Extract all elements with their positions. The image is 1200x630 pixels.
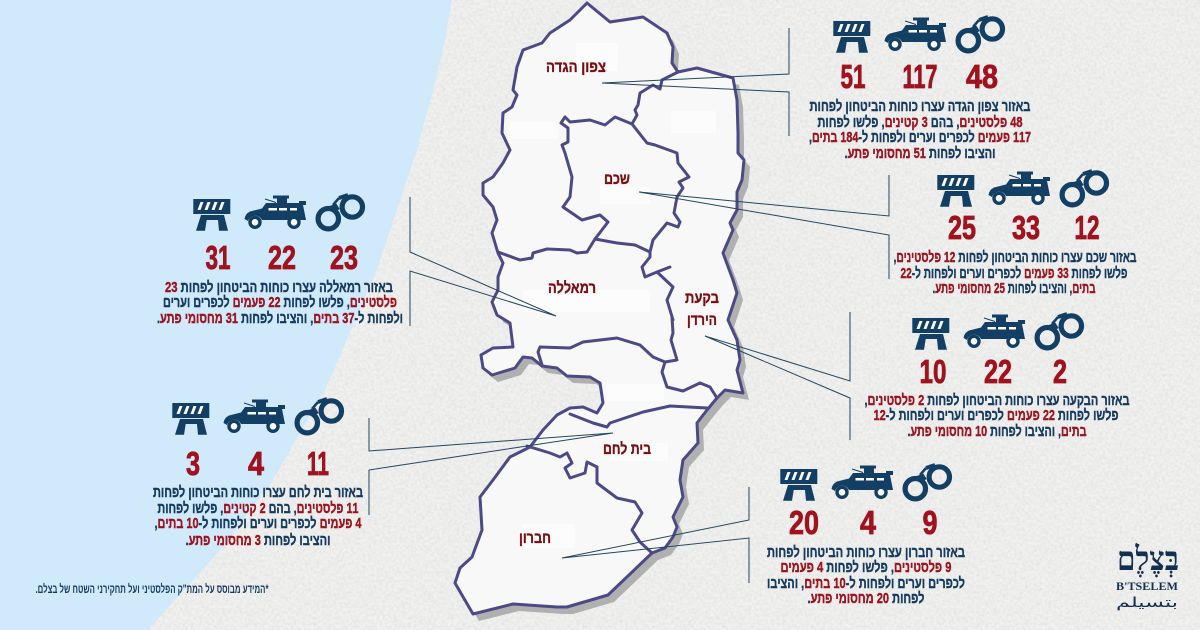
region label: hebron: חברון: [519, 530, 551, 547]
text block: באזור צפון הגדה עצרו כוחות הביטחון לפחות: [810, 98, 1031, 115]
numbers: 11: [307, 445, 329, 482]
panel: nablus: [894, 171, 1137, 297]
region label: nablus: שכם: [604, 171, 630, 188]
logo: B'Tselem: [1116, 542, 1179, 611]
region label: north: צפון הגדה: [546, 59, 606, 76]
numbers: 33: [1012, 209, 1040, 246]
text block: בתים, והציבו לפחות 25 מחסומי פתע.: [932, 280, 1096, 297]
text block: ולפחות ל-37 בתים, והציבו לפחות 31 מחסומי פתע.: [157, 310, 403, 327]
panel: ramallah: [157, 195, 403, 327]
text block: באזור הבקעה עצרו כוחות הביטחון לפחות 2 פלסטינים,: [864, 392, 1130, 409]
icons: barrier, vehicle, handcuffs: [937, 171, 1106, 207]
text block: 117 פעמים לכפרים וערים ולפחות ל-184 בתים,: [809, 129, 1031, 146]
region label: jordan valley: בקעת: [685, 290, 719, 307]
panel: jordan valley: [864, 314, 1130, 440]
numbers: 9: [922, 504, 938, 541]
numbers: [206, 239, 358, 276]
numbers: 25: [948, 209, 976, 246]
text block: באזור חברון עצרו כוחות הביטחון לפחות: [767, 544, 965, 561]
icons: barrier, vehicle, handcuffs: [780, 465, 950, 501]
panel: hebron: [767, 465, 965, 607]
icons: barrier, vehicle, handcuffs: [833, 17, 1002, 53]
text block: [153, 484, 363, 549]
numbers: 2: [1053, 353, 1067, 390]
numbers: 51: [840, 58, 866, 95]
numbers: 48: [966, 58, 998, 95]
footnote: *המידע מבוסס על המת"ק הפלסטיני ועל תחקירני השטח של בצלם.: [36, 582, 269, 596]
text block: 9 פלסטינים, פלשו לפחות 4 פעמים: [780, 559, 952, 576]
text block: [864, 392, 1130, 440]
region label: ramallah: רמאללה: [548, 279, 596, 297]
numbers: 10: [920, 353, 946, 390]
logo: B'Tselem: B'TSELEM: [1116, 581, 1178, 593]
text block: פלסטינים, פלשו לפחות 22 פעמים לכפרים וערים: [163, 294, 397, 311]
text block: פלשו לפחות 22 פעמים לכפרים וערים ולפחות ל-12: [874, 407, 1118, 424]
numbers: [920, 353, 1067, 390]
numbers: 4: [248, 445, 265, 482]
numbers: 31: [206, 239, 230, 276]
map of the West Bank: [455, 3, 750, 621]
icons: barrier, vehicle, handcuffs: [172, 399, 342, 435]
leader lines: hebron: [562, 487, 749, 583]
leader lines: jordan valley: [705, 312, 850, 440]
text block: באזור רמאללה עצרו כוחות הביטחון לפחות 23: [165, 279, 393, 296]
text block: 4 פעמים לכפרים וערים ולפחות ל-10 בתים,: [154, 515, 362, 532]
logo: B'Tselem: בְּצֶלֶם: [1117, 542, 1179, 578]
text block: 11 פלסטינים, בהם 2 קטינים, פלשו לפחות: [158, 500, 358, 517]
numbers: 3: [186, 445, 200, 482]
text block: והציבו לפחות 3 מחסומי פתע.: [186, 532, 330, 549]
text block: [894, 249, 1137, 297]
region label: bethlehem: בית לחם: [603, 440, 651, 458]
numbers: [948, 209, 1100, 246]
leader lines: nablus: [639, 175, 889, 279]
icons: barrier, vehicle, handcuffs: [193, 195, 362, 231]
logo: B'Tselem: بتسيلم: [1116, 595, 1178, 611]
sea area: [0, 0, 452, 630]
leader lines: bethlehem: [369, 418, 613, 515]
numbers: 117: [902, 58, 938, 95]
numbers: [789, 504, 938, 541]
numbers: 12: [1074, 209, 1100, 246]
text block: לפחות 20 מחסומי פתע.: [808, 590, 924, 607]
text block: פלשו לפחות 33 פעמים לכפרים וערים ולפחות ל-22: [900, 265, 1128, 282]
region label: jordan valley: הירדן: [687, 312, 717, 329]
numbers: 22: [984, 353, 1012, 390]
text block: [157, 279, 403, 327]
panel: north: [809, 17, 1031, 162]
text block: [767, 544, 965, 607]
text block: והציבו לפחות 51 מחסומי פתע.: [844, 145, 996, 162]
leader lines: north: [602, 28, 789, 136]
numbers: [186, 445, 329, 482]
leader lines: ramallah: [410, 197, 556, 326]
region label: jordan valley: [685, 290, 719, 329]
panel: bethlehem: [153, 399, 363, 549]
numbers: 20: [789, 504, 819, 541]
numbers: [840, 58, 998, 95]
numbers: 22: [268, 239, 296, 276]
text block: 48 פלסטינים, בהם 3 קטינים, פלשו לפחות: [818, 114, 1022, 131]
numbers: 23: [330, 239, 358, 276]
text block: בתים, והציבו לפחות 10 מחסומי פתע.: [908, 423, 1087, 440]
icons: barrier, vehicle, handcuffs: [912, 314, 1082, 350]
text block: באזור בית לחם עצרו כוחות הביטחון לפחות: [153, 484, 363, 501]
text block: [809, 98, 1031, 162]
numbers: 4: [860, 504, 877, 541]
text block: לכפרים וערים ולפחות ל-10 בתים, והציבו: [767, 575, 965, 592]
